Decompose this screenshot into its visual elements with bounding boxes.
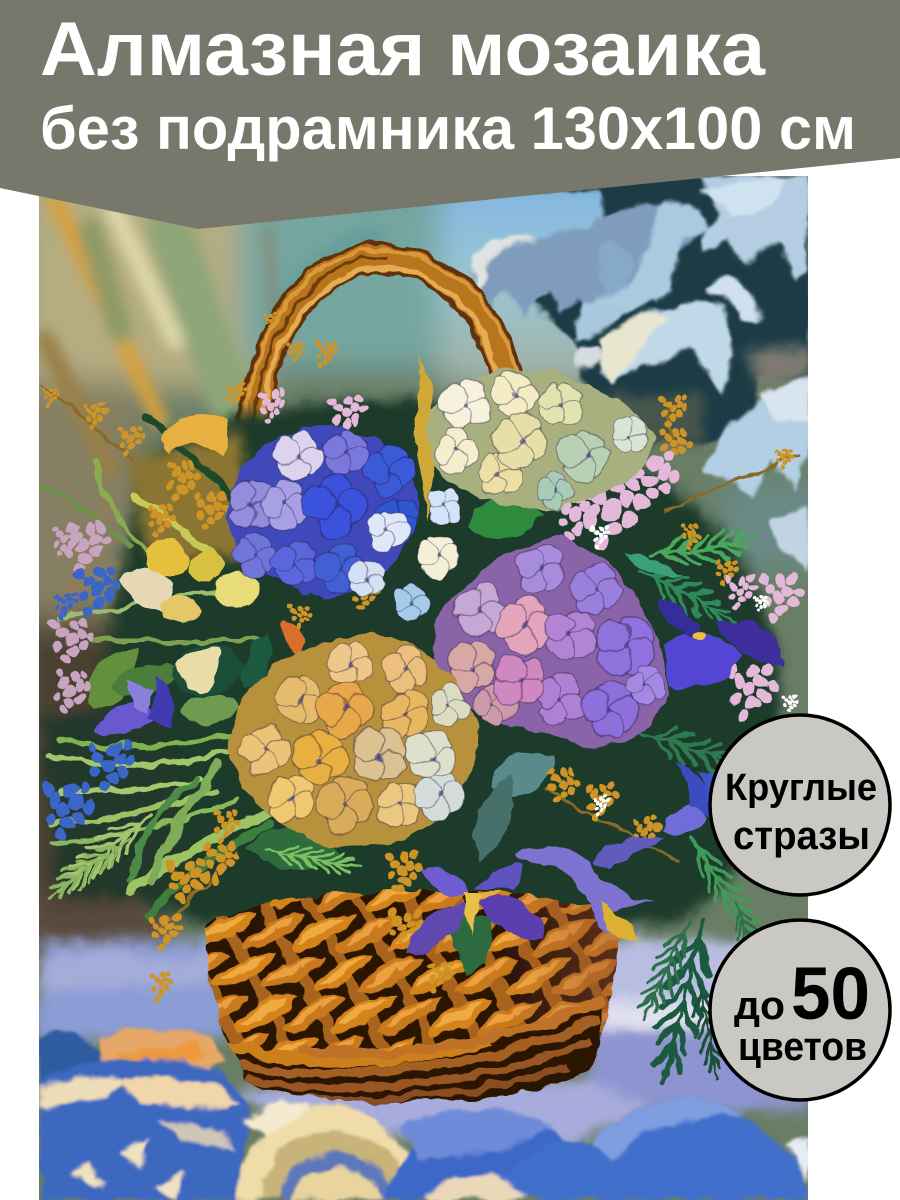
badge: up to 50 colours bbox=[710, 920, 890, 1100]
hydrangea: cream-green bbox=[425, 367, 657, 512]
background: winter forest bbox=[20, 160, 830, 1200]
light streaks bbox=[45, 190, 370, 620]
badge: up to 50 colours: цветов bbox=[738, 1025, 867, 1069]
hydrangea: blue-violet bbox=[225, 424, 420, 600]
orange bud and left tulips bbox=[120, 355, 440, 693]
basket body bbox=[200, 880, 630, 1110]
foliage mass bbox=[39, 400, 780, 1088]
mimosa, goldenrod and meadow sprigs bbox=[41, 311, 806, 1000]
small white-blue blossoms bbox=[348, 488, 460, 622]
snowbanks and ground bbox=[39, 940, 810, 1200]
iris: left bbox=[94, 675, 174, 736]
header banner bbox=[0, 0, 900, 229]
iris: blue, right edge bbox=[662, 762, 714, 836]
banner shape bbox=[0, 0, 900, 229]
title: Алмазная мозаика bbox=[40, 7, 766, 92]
subtitle: без подрамника 130х100 см bbox=[40, 95, 856, 162]
badge: round rhinestones bbox=[710, 715, 890, 895]
hydrangea: golden yellow bbox=[228, 631, 478, 848]
badge: round rhinestones: Круглые bbox=[725, 767, 877, 809]
iris: basket front bbox=[405, 835, 665, 975]
iris flowers bbox=[94, 598, 784, 975]
painting: flower basket in snow bbox=[39, 176, 808, 1200]
hydrangea: pink-purple bbox=[433, 535, 669, 747]
badge: up to 50 colours: до bbox=[734, 984, 785, 1028]
badge: round rhinestones: стразы bbox=[733, 814, 870, 858]
textured painting layer bbox=[39, 176, 810, 1200]
iris: right bbox=[658, 598, 784, 689]
badge: up to 50 colours: 50 bbox=[791, 952, 870, 1035]
basket handle bbox=[234, 239, 522, 424]
snow-covered fir tree bbox=[472, 176, 810, 570]
